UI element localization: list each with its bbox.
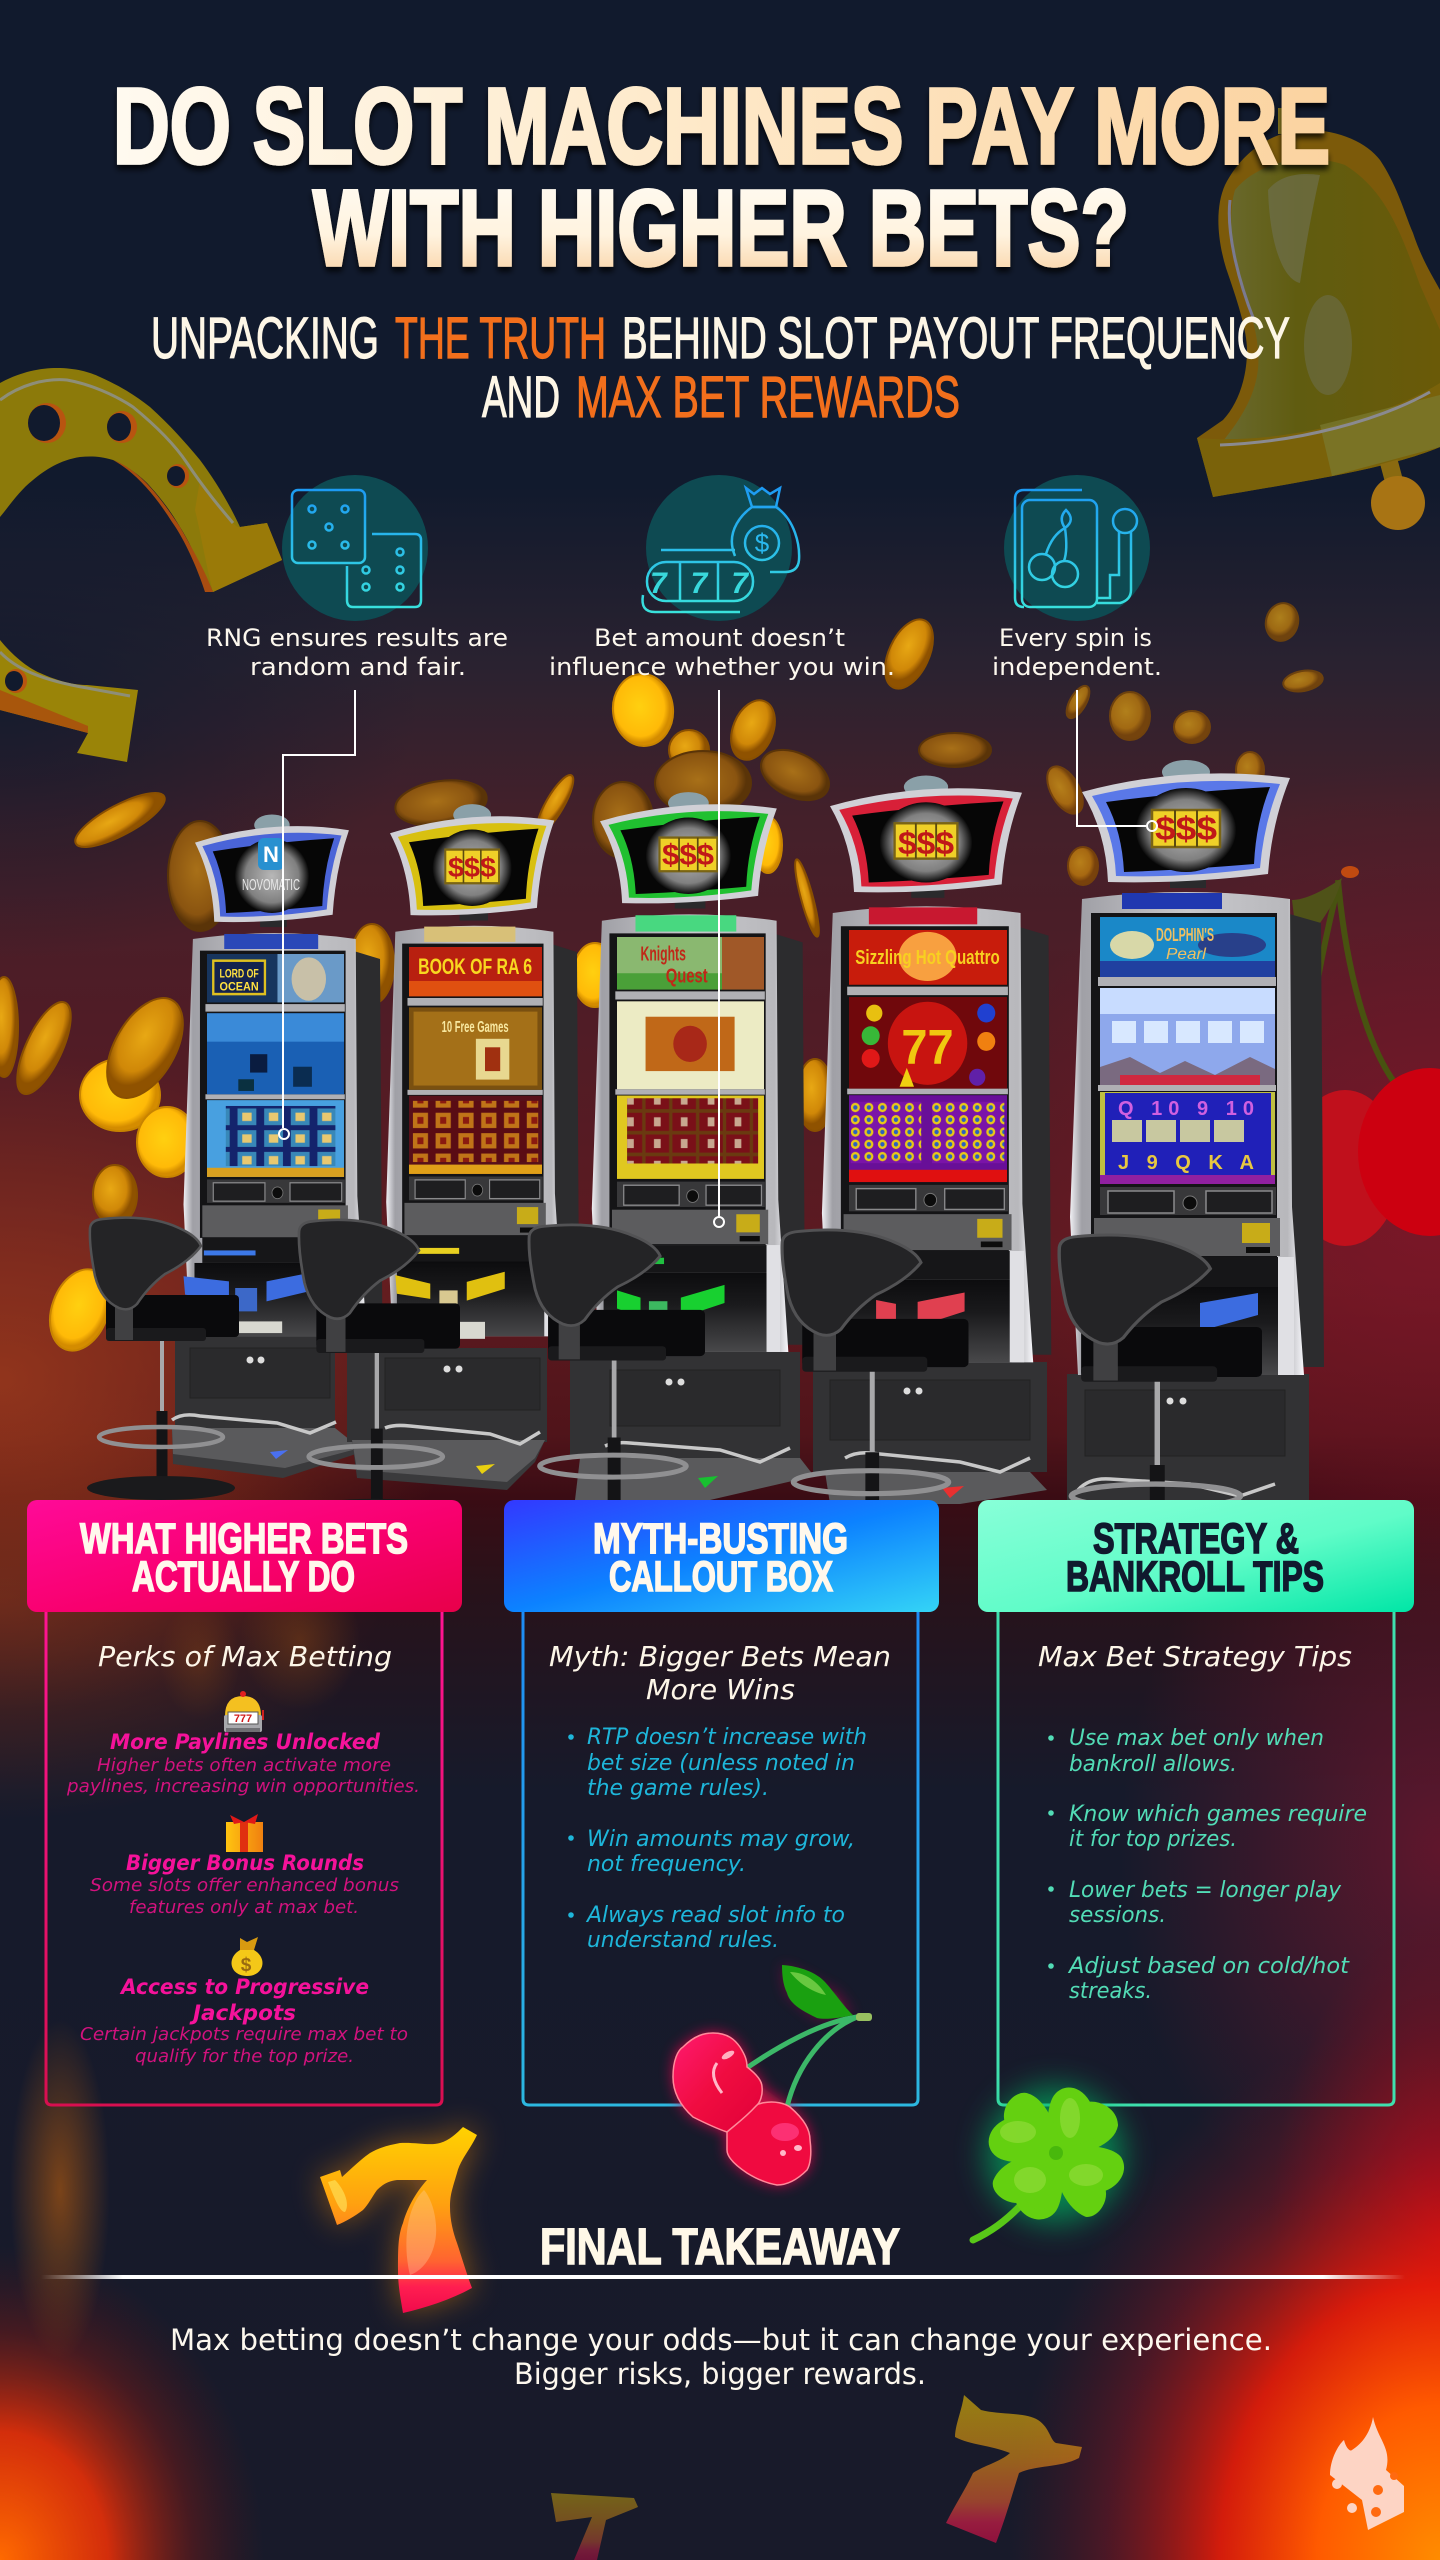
header: green [978,1500,1414,1612]
strategy bullets [1048,1726,1367,2004]
icon: cherry slot machine [1004,475,1150,621]
decorative bell [1197,108,1440,530]
machine 5: DOLPHIN'S [1156,925,1214,945]
connector: every spin [1077,690,1157,831]
myth bullets [568,1725,867,1953]
icon: gift [226,1814,263,1852]
myth bullets: not frequency. [587,1852,746,1877]
strategy bullets: bankroll allows. [1069,1752,1237,1777]
connector: RNG [279,690,355,1139]
callout text: RNG [206,624,508,681]
decorative horseshoe [0,368,282,762]
final takeaway text: Max betting doesn’t change your odds—but it can change your experience. [170,2323,1272,2357]
faded seven [946,2395,1082,2543]
callout text: every spin: independent. [992,653,1162,681]
strategy bullets: it for top prizes. [1069,1827,1237,1852]
callout text: RNG: random and fair. [250,653,466,681]
header: blue [504,1500,939,1612]
icon: money bag [232,1937,262,1976]
machine 1: OCEAN [220,981,259,994]
machine 5 base [1067,1374,1309,1504]
machine 1 top monitor: NOVOMATIC [242,877,300,894]
machine 4 top monitor: $$$ [898,825,954,861]
strategy bullets: sessions. [1069,1903,1166,1928]
header: pink: ACTUALLY DO [132,1553,355,1601]
icon: dice [282,475,428,621]
subheading: myth: More Wins [646,1673,795,1706]
final takeaway text: Bigger risks, bigger rewards. [514,2357,926,2391]
connector: bet amount [714,690,724,1227]
machine 2 top monitor: $$$ [448,852,496,883]
machine 5: Q 10 9 10 [1118,1098,1254,1120]
machine 2 base [347,1348,547,1490]
machine 3: Knights [641,944,686,966]
header: pink: WHAT HIGHER BETS [80,1515,408,1563]
icon: slot machine [224,1691,264,1732]
machine 3 top monitor: $$$ [662,839,714,872]
machine 1: LORD OF [220,968,259,980]
icon: 777 reels and money bag [642,475,799,621]
myth bullets: the game rules). [587,1776,769,1801]
icon: 777 reels and money bag: 777 [650,567,749,600]
icon: slot machine: 777 [234,1713,252,1725]
perk: progressive jackpots: Access to Progressive [119,1975,369,1999]
myth bullets: RTP doesn’t increase with [587,1725,867,1750]
machine 2: 10 Free Games [442,1019,509,1036]
perk: more paylines: More Paylines Unlocked [110,1730,381,1754]
logo: flaming dice [1330,2417,1404,2530]
title [113,65,1330,288]
subtitle: MAX BET REWARDS [576,365,960,430]
header: green: BANKROLL TIPS [1066,1553,1324,1601]
callout text: bet amount: influence whether you win. [549,653,895,681]
perk: more paylines [66,1730,420,1797]
stools [87,1216,1262,1500]
icon: red seven [320,2127,477,2313]
subtitle: UNPACKING [151,306,379,371]
machine 5 [1067,760,1324,1504]
subheading: myth: Myth: Bigger Bets Mean [549,1640,891,1673]
title: WITH HIGHER BETS? [313,167,1129,288]
myth bullets: Win amounts may grow, [587,1827,855,1852]
callout text: bet amount [549,624,895,681]
faded seven lower [551,2493,638,2560]
machine 1 top monitor [195,814,349,927]
machine 2 [347,804,579,1490]
heading: final takeaway: FINAL TAKEAWAY [540,2218,900,2275]
icon: four-leaf clover [973,2087,1123,2240]
callout text: every spin: Every spin is [999,624,1152,652]
callout text: every spin [992,624,1162,681]
perk: bonus rounds: features only at max bet. [129,1897,359,1918]
strategy bullets: Adjust based on cold/hot [1067,1954,1350,1979]
perk: progressive jackpots: qualify for the top prize. [135,2046,354,2067]
subtitle: AND [482,365,560,430]
machine 4: 77 [901,1021,954,1075]
machine 3 [570,792,814,1500]
perk: bonus rounds [90,1851,399,1918]
subheading: myth [549,1640,891,1706]
machine 5: Pearl [1166,946,1206,963]
header: green: STRATEGY & [1093,1515,1299,1563]
machine 1 base [172,1336,362,1478]
subtitle [151,306,1290,430]
myth bullets: understand rules. [587,1928,779,1953]
strategy bullets: Know which games require [1069,1802,1367,1827]
machine 4 base [813,1362,1047,1504]
final takeaway text [170,2323,1272,2391]
subheading: strategy: Max Bet Strategy Tips [1038,1640,1352,1673]
divider rule [41,2275,1405,2279]
machine 4 [813,776,1051,1504]
subtitle: THE TRUTH [395,306,606,371]
icon: 777 reels and money bag: $ [755,528,770,558]
machine 4 top monitor [830,776,1022,898]
machine 4: Sizzling Hot Quattro [855,947,1000,969]
panel: strategy and bankroll tips [978,1500,1414,2105]
falling gold coins [0,600,1324,1359]
machine 1 top monitor: N [263,842,279,867]
perk: progressive jackpots: Jackpots [189,2001,296,2025]
machine 5 top monitor: $$$ [1155,810,1217,847]
callout text: bet amount: Bet amount doesn’t [594,624,845,652]
machine 1 [172,814,382,1478]
machine 5 top monitor [1082,760,1290,888]
machine 3: Quest [666,966,708,987]
header: blue: CALLOUT BOX [609,1553,833,1601]
perk: progressive jackpots [80,1975,408,2067]
strategy bullets: Lower bets = longer play [1069,1878,1342,1903]
perk: more paylines: paylines, increasing win opportunities. [66,1776,420,1797]
icon: glossy cherries [673,1965,872,2185]
perk: bonus rounds: Some slots offer enhanced bonus [90,1875,399,1896]
subheading: perks: Perks of Max Betting [98,1640,392,1673]
perk: progressive jackpots: Certain jackpots require max bet to [80,2024,408,2045]
myth bullets: Always read slot info to [585,1903,845,1928]
perk: more paylines: Higher bets often activate more [97,1755,391,1776]
strategy bullets: Use max bet only when [1069,1726,1324,1751]
machine 5: J 9 Q K A [1118,1152,1254,1174]
header: pink [27,1500,462,1612]
machine 3 top monitor [600,792,777,909]
callout text: RNG: RNG ensures results are [206,624,508,652]
decorative large cherry [1290,866,1440,1246]
myth bullets: bet size (unless noted in [587,1751,855,1776]
panel: myth-busting callout box [504,1500,939,2105]
machine 3 base [570,1352,814,1500]
icon: money bag: $ [241,1955,252,1976]
machine 2: BOOK OF RA 6 [418,955,532,979]
machine 2 top monitor [390,804,554,921]
perk: bonus rounds: Bigger Bonus Rounds [126,1851,364,1875]
panel: what higher bets actually do [27,1500,462,2105]
strategy bullets: streaks. [1069,1979,1152,2004]
header: blue: MYTH-BUSTING [593,1515,848,1563]
